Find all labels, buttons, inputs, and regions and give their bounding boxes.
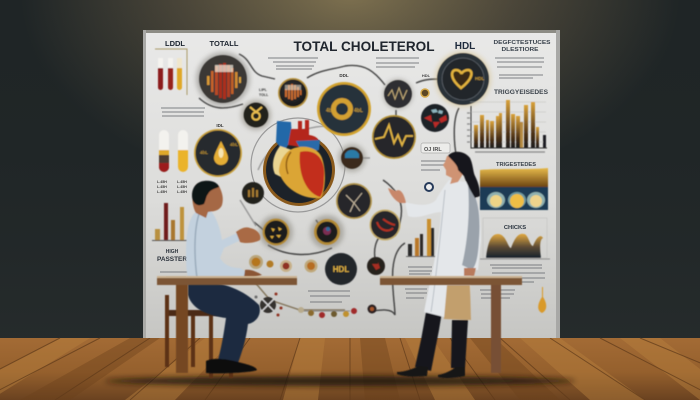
person: man seated [186, 181, 262, 373]
small legend text: L.45H [157, 185, 167, 189]
bar chart: left [152, 203, 189, 240]
small legend text: L.45H [177, 180, 187, 184]
icon: drop gauge [194, 129, 242, 177]
heading: digestive [494, 40, 551, 53]
icon: heart rate gauge [372, 115, 416, 159]
man hands [236, 227, 260, 243]
icon: blue droplet gauge [338, 144, 366, 172]
icon: small red disc [367, 257, 385, 275]
heading: high passter [157, 249, 188, 263]
text lines [160, 58, 545, 302]
panel: cholesterol infographic board [143, 30, 560, 338]
heading: chicks: CHICKS [504, 225, 526, 231]
callout: OJ IRL label [421, 143, 450, 153]
icon: total gauge [196, 52, 250, 106]
icon: target small [425, 183, 433, 191]
icon: symbol disc [336, 183, 372, 219]
icon: LDL ring gauge [317, 82, 371, 136]
small legend text: L.45H [177, 190, 187, 194]
woman shoes [397, 366, 428, 377]
heading: HDL: HDL [455, 41, 475, 52]
man shirt [186, 210, 245, 282]
man shoes [206, 359, 257, 373]
woman apron [444, 285, 471, 320]
icon: crossed dial [254, 292, 282, 316]
woman head [443, 155, 464, 184]
icon: wave small [383, 79, 413, 109]
icon: red drops [421, 104, 449, 132]
wooden floor [0, 338, 700, 400]
heading: LDL: LDDL [165, 39, 185, 48]
small legend text: L.45H [157, 180, 167, 184]
icon: small bars gauge: TOLL [259, 93, 269, 97]
woman coat [405, 180, 481, 320]
small legend text: L.45H [157, 190, 167, 194]
woman hand [388, 188, 406, 203]
heading: high passter: PASSTER [157, 256, 188, 263]
icon: HDL heart gauge: HDL [475, 76, 484, 81]
icon: HDL badge [325, 253, 357, 285]
woman trousers [415, 312, 442, 371]
label: IDL: IDL [216, 123, 224, 128]
label: DDL: DDL [339, 73, 349, 78]
icon: LDL ring gauge: 4bL [354, 108, 363, 114]
icon: node B [310, 215, 344, 249]
icon: small bars gauge: LIPL [259, 88, 268, 92]
icon: anatomical heart [263, 120, 335, 206]
label: HDL small: HDL [422, 73, 431, 78]
heading: high passter: HIGH [166, 249, 179, 255]
arc around heart [251, 118, 345, 212]
icon: small ring [421, 89, 429, 97]
bar chart: triglycerides [467, 100, 547, 152]
icon: small knot [241, 100, 271, 130]
man trousers [188, 282, 260, 363]
area chart: chicks [480, 218, 550, 259]
heading: Total: TOTALL [210, 39, 239, 48]
table: right [380, 276, 522, 373]
icon: small bars gauge [259, 78, 308, 108]
icon: drop gauge: 4bL [230, 142, 238, 147]
icon: drop gauge: 4bL [200, 150, 208, 155]
icon: red wave disc [370, 210, 400, 240]
small legend text: L.45H [177, 185, 187, 189]
icon: LDL ring gauge: 4bL [326, 108, 335, 114]
test tubes: lower [159, 130, 188, 172]
furniture: stool [165, 295, 237, 378]
person: woman standing [388, 152, 481, 378]
callout: OJ IRL label: OJ IRL [424, 147, 442, 153]
bar chart: center [406, 219, 436, 256]
table: left [157, 276, 297, 373]
beaded timeline [298, 307, 350, 318]
heading: triglycerides 2: TRIGESTEDES [496, 162, 536, 168]
heading: digestive: DLESTIORE [502, 47, 539, 53]
connector lines [199, 54, 459, 315]
title: TOTAL CHOLETEROL [294, 38, 435, 54]
woman hair [448, 152, 480, 198]
icon: node A [259, 215, 293, 249]
icon: HDL badge: HDL [333, 265, 349, 274]
man head [192, 182, 223, 218]
heading: digestive: DEGFCTESTUCES [494, 40, 551, 46]
icon: golden flask [538, 287, 546, 313]
icon: HDL heart gauge [435, 51, 491, 107]
icon: small dark disc top [242, 182, 264, 204]
small node row [249, 255, 318, 272]
small legend text [157, 180, 187, 194]
test tubes: LDL [155, 49, 187, 95]
area chart: triglycerides band [480, 168, 548, 210]
icon: lower right nodes [351, 304, 376, 314]
heading: triglycerides: TRIGGYEISEDES [494, 89, 549, 96]
